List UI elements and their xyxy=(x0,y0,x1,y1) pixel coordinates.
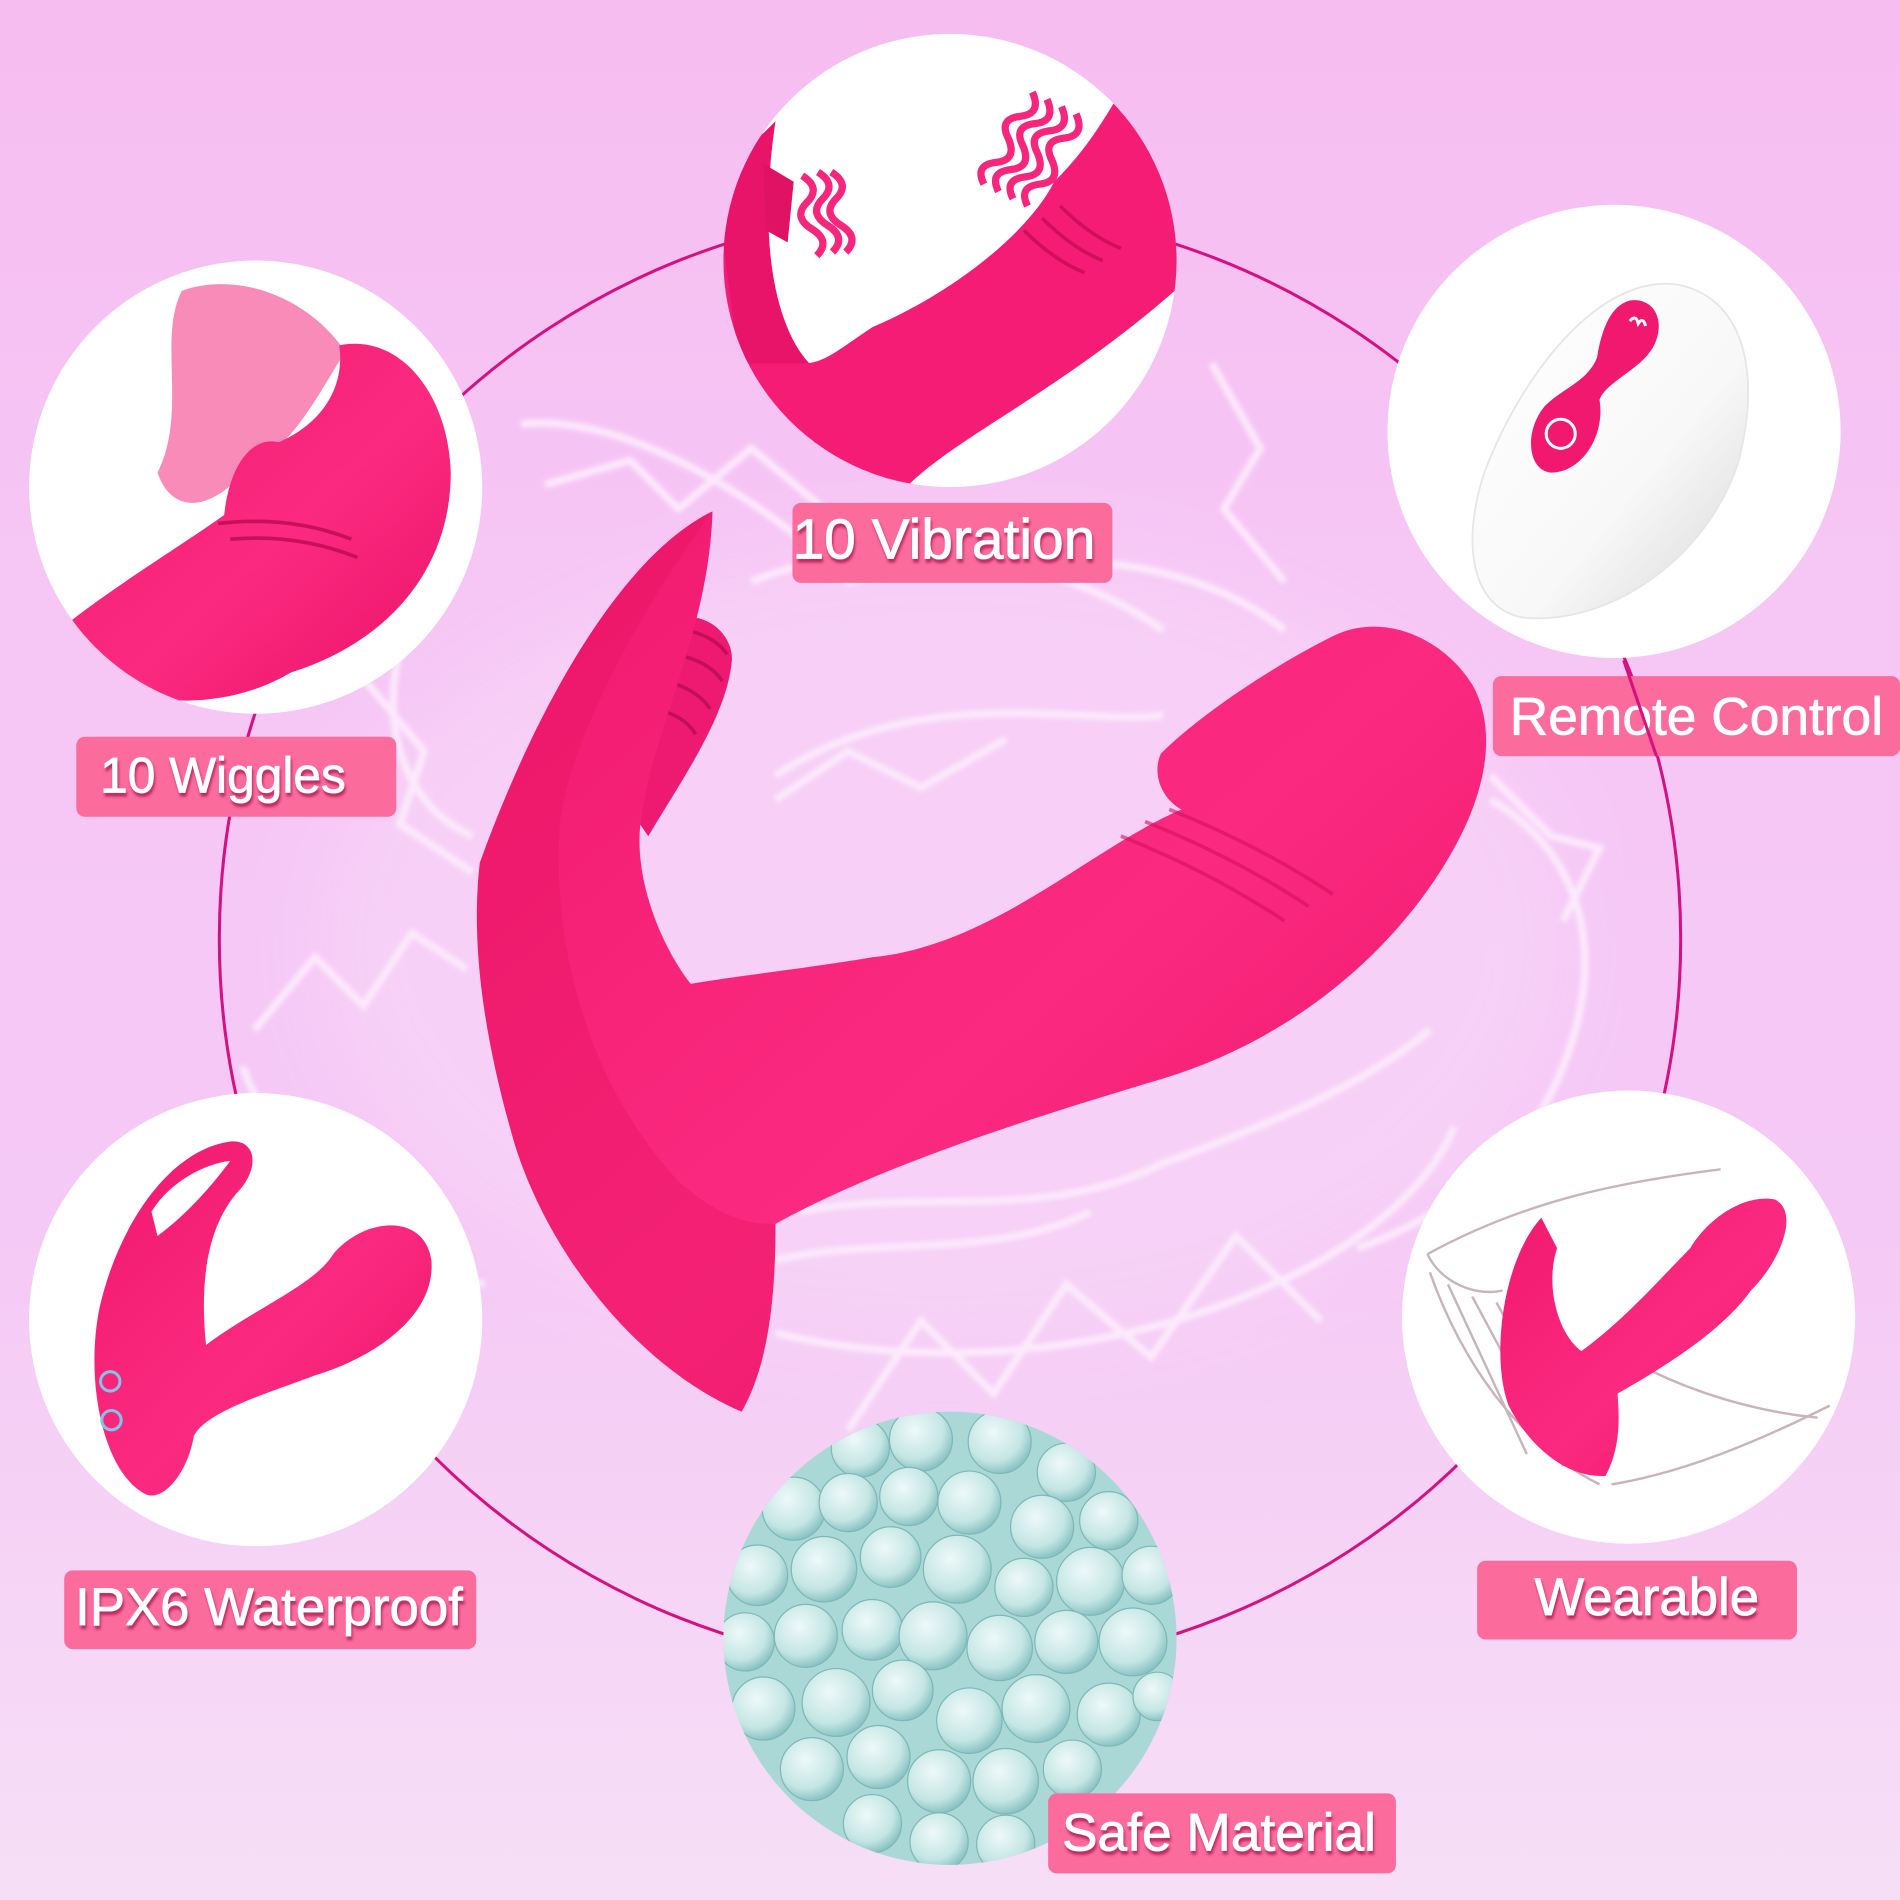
main product xyxy=(477,511,1486,1412)
label: Safe Material: Safe Material xyxy=(1062,1803,1376,1862)
icon: vibration waves xyxy=(801,92,1079,256)
panel: Wearable xyxy=(1402,1091,1855,1544)
underwear outline xyxy=(1427,1169,1830,1484)
energy swirl behind the product xyxy=(242,364,1599,1430)
connecting ring xyxy=(219,208,1681,1670)
label: 10 Wiggles: 10 Wiggles xyxy=(100,747,346,803)
body silhouette xyxy=(477,511,1486,1412)
icon: remote handset xyxy=(1472,284,1748,618)
label: Remote Control: Remote Control xyxy=(1510,687,1883,746)
label: Wearable xyxy=(1477,1561,1797,1639)
icon: control buttons xyxy=(101,1372,121,1430)
small ribbed arm xyxy=(606,617,732,836)
panel: 10 Vibration xyxy=(723,34,1177,488)
label: Safe Material xyxy=(1048,1793,1396,1873)
label: IPX6 Waterproof: IPX6 Waterproof xyxy=(75,1578,463,1637)
panel: Safe Material xyxy=(716,1408,1181,1873)
panel: 10 Wiggles xyxy=(29,261,482,714)
mini product xyxy=(1500,1199,1786,1476)
body shading xyxy=(477,511,776,1412)
panel: Remote Control xyxy=(1387,205,1841,658)
label: 10 Vibration: 10 Vibration xyxy=(793,508,1095,572)
ridge detail xyxy=(1121,809,1333,921)
label: 10 Wiggles xyxy=(76,737,396,817)
label: Remote Control xyxy=(1493,660,1900,756)
label: Wearable: Wearable xyxy=(1534,1568,1759,1627)
panel: IPX6 Waterproof xyxy=(29,1093,482,1546)
